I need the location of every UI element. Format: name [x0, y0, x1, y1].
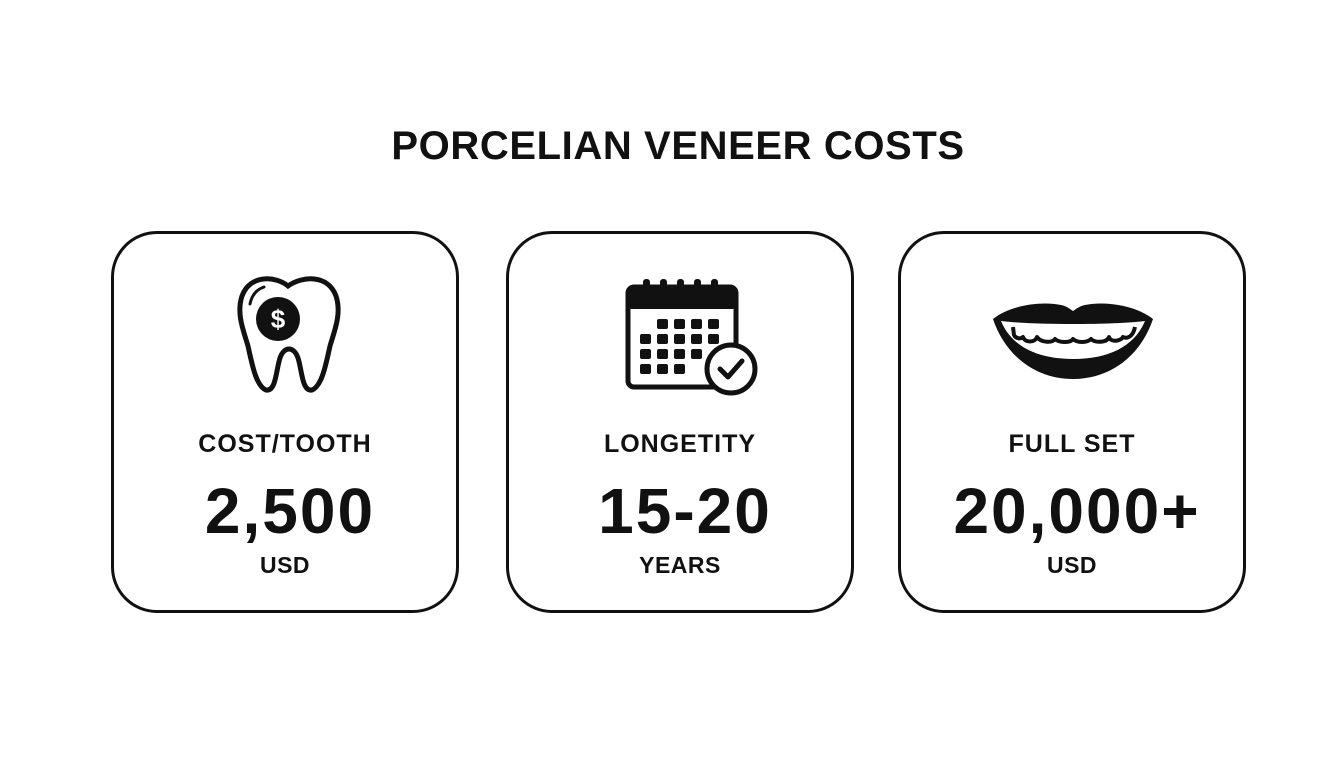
icon: tooth with dollar	[237, 276, 341, 393]
icon: calendar with check	[626, 279, 758, 396]
unit: USD	[260, 552, 310, 578]
unit: YEARS	[639, 552, 721, 578]
label: FULL SET	[1008, 430, 1135, 458]
value: 15-20	[598, 475, 772, 547]
unit: USD	[1047, 552, 1097, 578]
label: LONGETITY	[604, 430, 756, 458]
label: COST/TOOTH	[198, 430, 372, 458]
panel: full set	[898, 231, 1246, 613]
value: 20,000+	[953, 475, 1201, 547]
panel: cost per tooth	[111, 231, 459, 613]
value: 2,500	[205, 475, 375, 547]
title: PORCELIAN VENEER COSTS	[391, 124, 965, 168]
panel: longevity	[506, 231, 854, 613]
icon: smiling lips	[993, 304, 1153, 379]
icon: tooth with dollar: $	[271, 304, 286, 334]
